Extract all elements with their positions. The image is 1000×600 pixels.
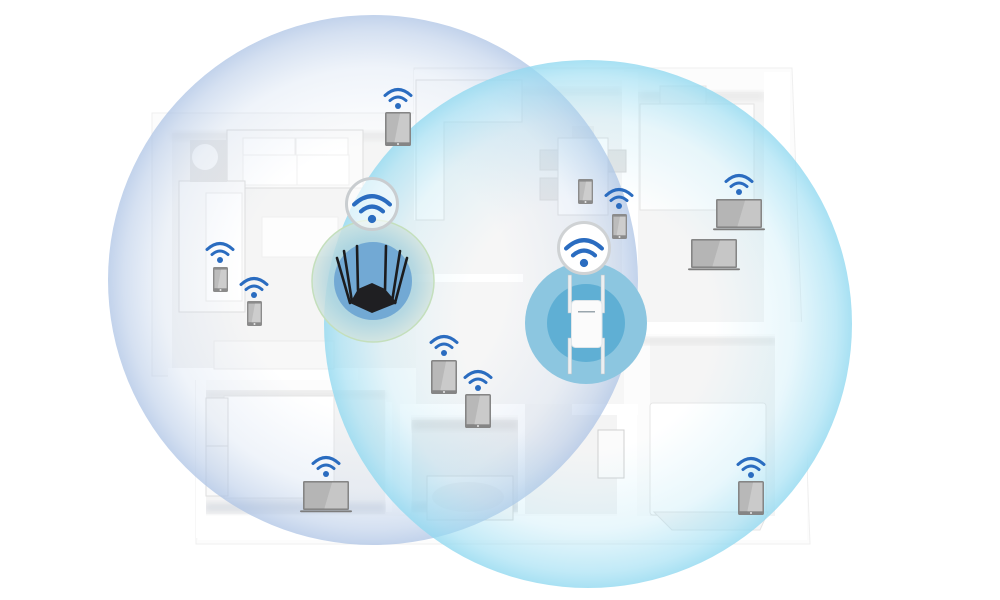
icon: range extender xyxy=(568,275,605,374)
room floors xyxy=(172,88,776,516)
device: phone on table xyxy=(578,179,593,204)
icon: router xyxy=(337,246,407,313)
walls xyxy=(168,70,808,540)
living room sofa xyxy=(179,130,363,312)
wifi badge: extender xyxy=(558,222,610,274)
device: laptop on bed xyxy=(713,176,765,230)
extender signal xyxy=(525,262,647,384)
top right bed xyxy=(640,86,754,210)
router signal xyxy=(312,220,434,342)
device: laptop bottom left xyxy=(300,458,352,512)
kitchen counter xyxy=(416,80,522,220)
bathtub xyxy=(427,476,513,520)
device: phone on sofa xyxy=(207,244,233,292)
device: laptop without signal xyxy=(688,239,740,270)
bottom right bed xyxy=(650,403,768,530)
bottom left bed xyxy=(206,396,334,498)
living room console xyxy=(214,341,334,369)
wifi badge: router xyxy=(346,178,398,230)
side table xyxy=(190,140,227,182)
device: phone living room xyxy=(241,278,267,326)
building shell xyxy=(152,68,810,544)
device: tablet hallway xyxy=(431,336,457,394)
floor plan xyxy=(152,68,810,544)
device: tablet hallway two xyxy=(465,372,491,428)
coverage circle: extender xyxy=(324,60,852,588)
device: phone by chairs xyxy=(606,190,632,239)
coffee table xyxy=(262,217,338,257)
dining table and chairs xyxy=(540,126,626,215)
coverage circle: router xyxy=(108,15,638,545)
device: tablet bottom right xyxy=(738,458,764,515)
door xyxy=(598,430,624,478)
device: tablet top xyxy=(385,90,411,146)
